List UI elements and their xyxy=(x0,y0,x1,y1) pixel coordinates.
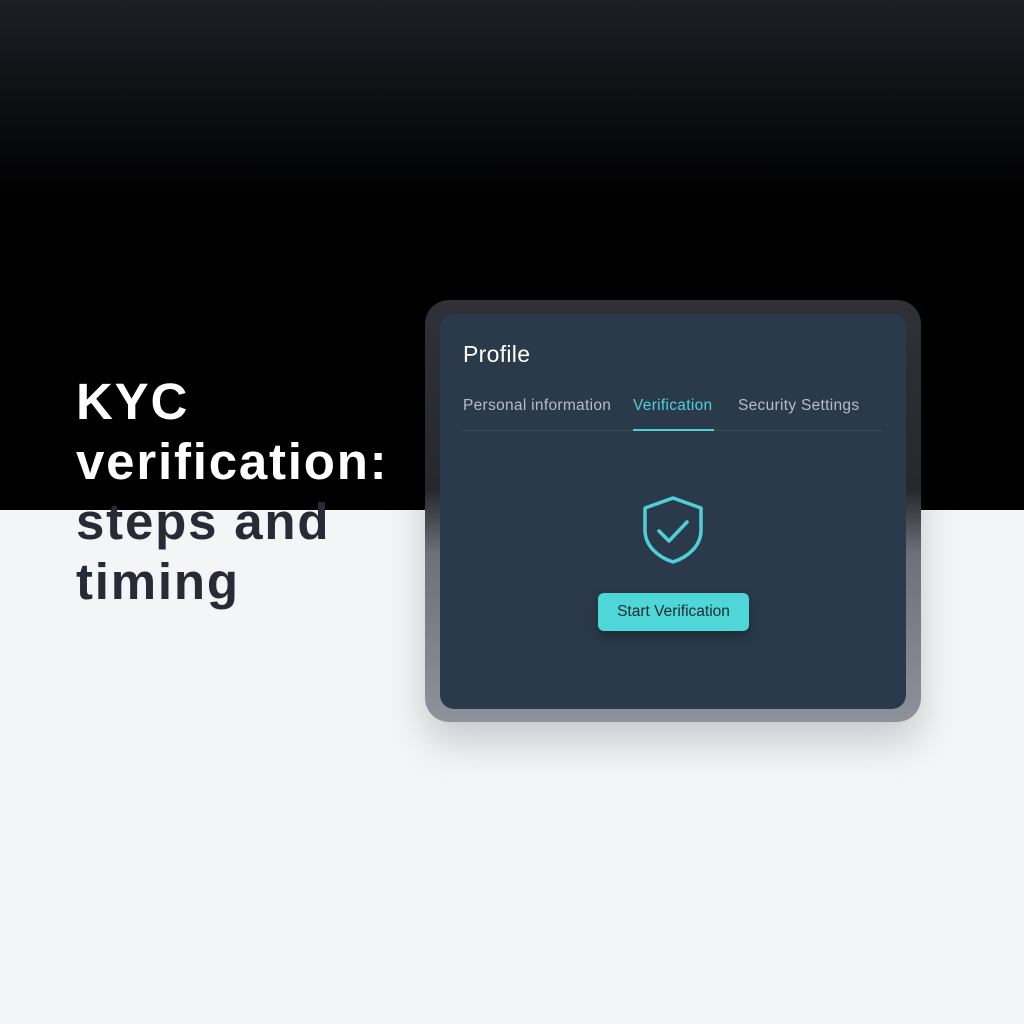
title: timing xyxy=(76,553,240,610)
title xyxy=(76,373,388,610)
tabs: Security Settings xyxy=(738,397,859,414)
tabs: Personal information xyxy=(463,397,611,414)
heading: Profile: Profile xyxy=(463,341,530,367)
title: verification: xyxy=(76,433,388,490)
title: KYC xyxy=(76,373,189,430)
tabs xyxy=(463,397,883,431)
button: Start Verification xyxy=(598,593,749,631)
icon: shield check xyxy=(643,496,703,564)
panel: profile card xyxy=(425,300,921,722)
tabs: Verification xyxy=(633,397,712,414)
button: Start Verification: Start Verification xyxy=(617,603,730,620)
title: steps and xyxy=(76,493,330,550)
